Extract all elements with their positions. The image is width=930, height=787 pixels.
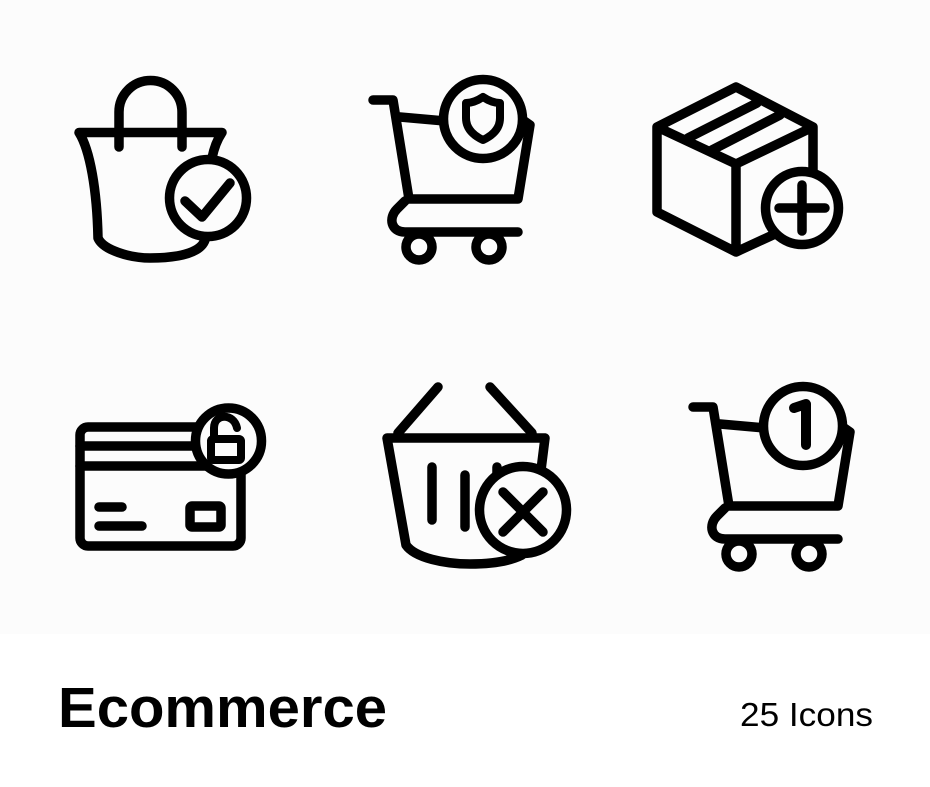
icon count label: 25 Icons [740,696,873,733]
icon: credit card with open padlock [80,408,262,546]
icon: shopping bag with check [79,81,246,258]
icon: shopping cart with shield [373,80,530,260]
icon: shopping cart with number one badge [693,386,850,567]
icon: cardboard box with plus [657,87,838,252]
title: Ecommerce [58,676,387,740]
icon: shopping basket with cross [387,387,566,564]
